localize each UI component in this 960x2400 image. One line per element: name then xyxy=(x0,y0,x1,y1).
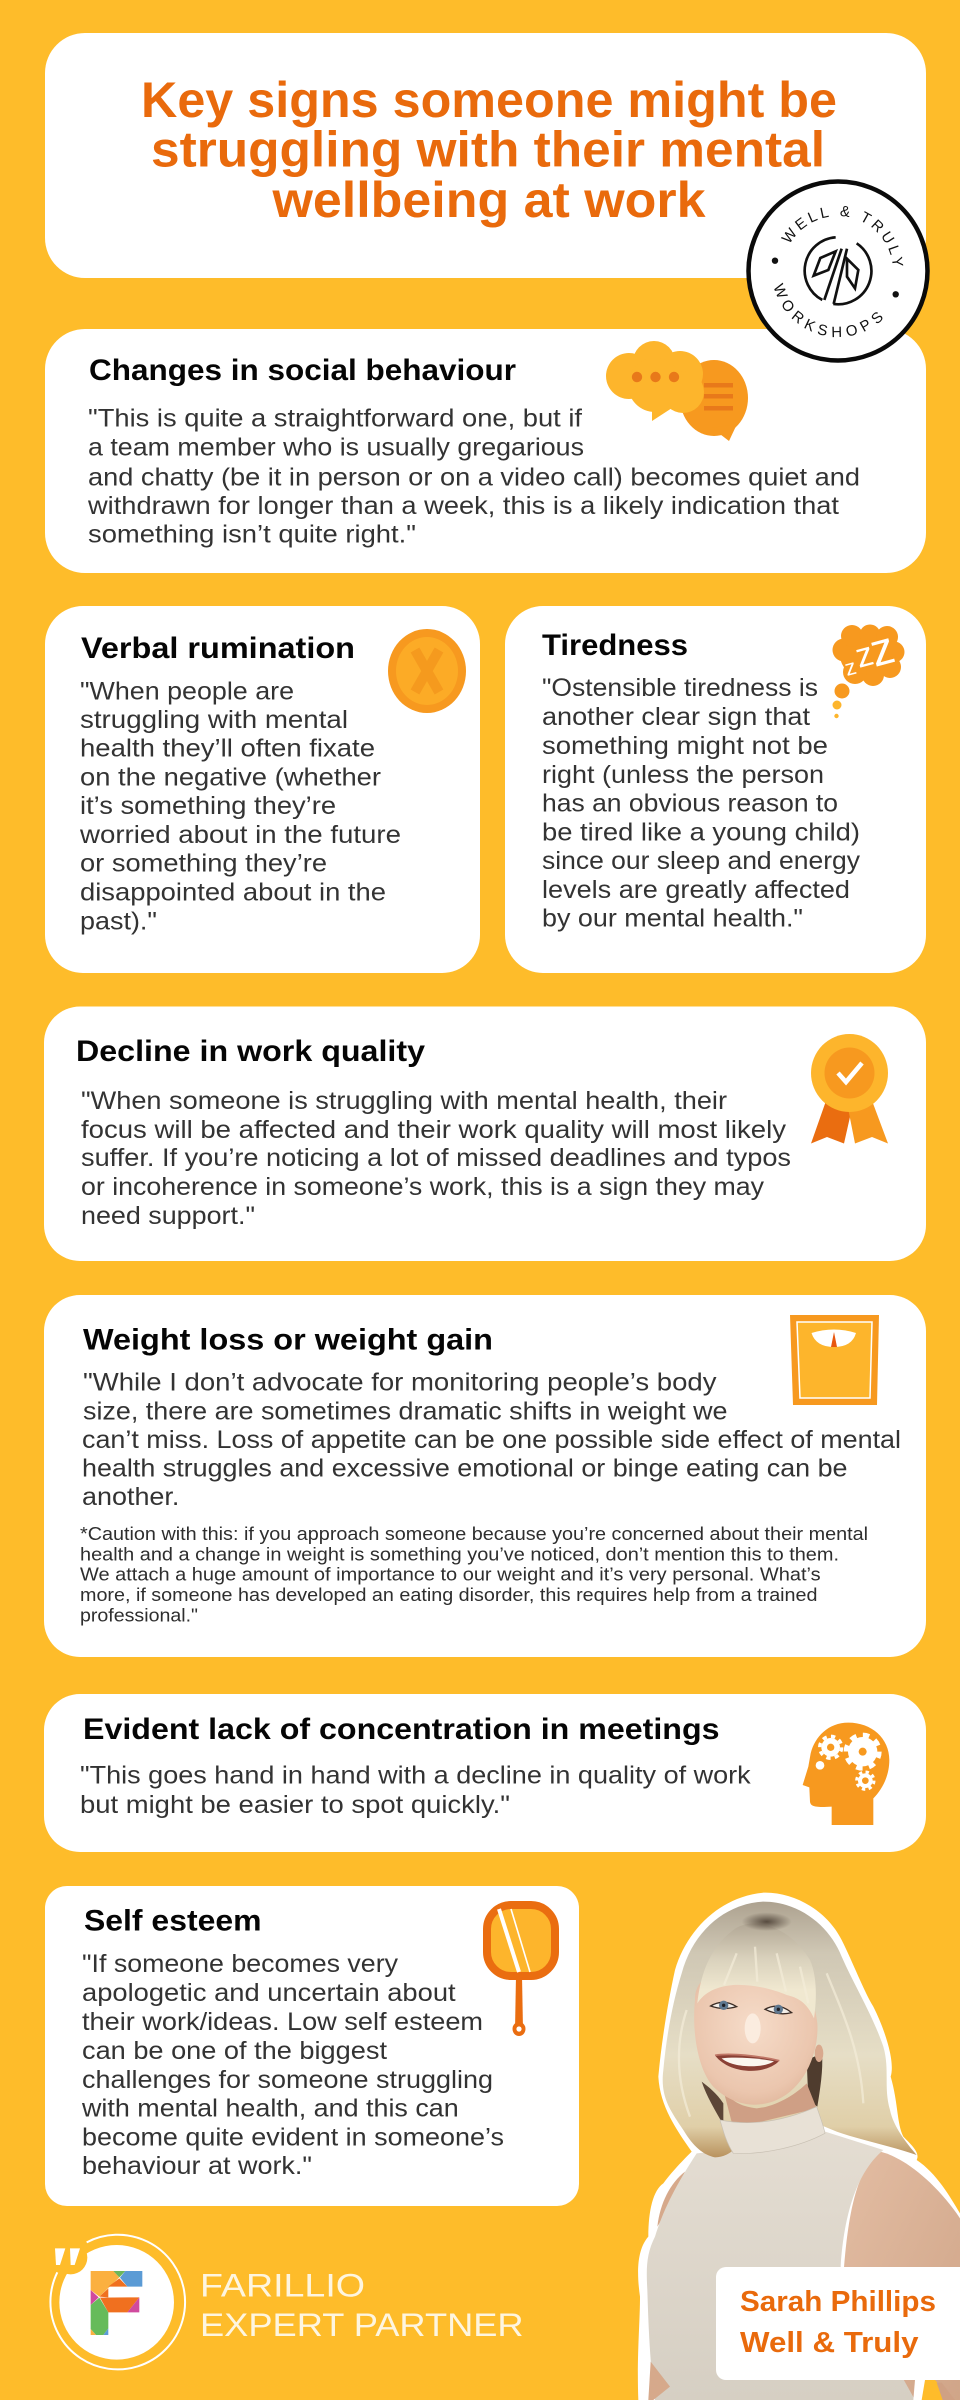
body text: suffer. If you’re noticing a lot of missed deadlines and typos xyxy=(81,1144,791,1172)
heading: Weight loss or weight gain xyxy=(83,1324,493,1357)
body text: has an obvious reason to xyxy=(542,790,838,818)
body text: it’s something they’re xyxy=(80,792,336,820)
icon: sleep thought cloud: z xyxy=(864,620,900,677)
heading: Changes in social behaviour xyxy=(89,354,517,387)
portrait: sarah phillips xyxy=(638,1893,960,2400)
body text: but might be easier to spot quickly." xyxy=(80,1791,510,1819)
body text: levels are greatly affected xyxy=(542,876,850,904)
body text: by our mental health." xyxy=(542,905,803,933)
logo text: EXPERT PARTNER xyxy=(200,2307,524,2343)
caution note: *Caution with this: if you approach someone because you’re concerned about their mental xyxy=(80,1524,868,1544)
body text: another clear sign that xyxy=(542,703,810,731)
name card xyxy=(716,2267,960,2380)
body text: "If someone becomes very xyxy=(82,1950,399,1978)
icon: well and truly workshops badge: WELL & TRULY xyxy=(780,206,904,266)
body text: their work/ideas. Low self esteem xyxy=(82,2008,483,2036)
icon: medal xyxy=(811,1034,888,1144)
panel: changes in social behaviour xyxy=(45,329,926,573)
body text: withdrawn for longer than a week, this is a likely indication that xyxy=(87,492,839,520)
body text: right (unless the person xyxy=(542,761,824,789)
caution note xyxy=(80,1524,868,1625)
body text: be tired like a young child) xyxy=(542,818,860,846)
caution note: professional." xyxy=(80,1605,198,1625)
icon: well and truly workshops badge xyxy=(746,179,930,363)
panel: tiredness xyxy=(505,606,926,973)
body text: worried about in the future xyxy=(79,821,401,849)
body text: health they’ll often fixate xyxy=(80,734,375,762)
logo text xyxy=(200,2268,524,2343)
body text xyxy=(81,1950,504,2180)
icon: head with gears xyxy=(803,1723,889,1825)
body text: something isn’t quite right." xyxy=(88,521,416,549)
caution note: We attach a huge amount of importance to our weight and it’s very personal. What’s xyxy=(80,1565,821,1585)
body text: behaviour at work." xyxy=(82,2152,312,2180)
icon: weighing scale xyxy=(790,1315,879,1405)
body text: need support." xyxy=(81,1202,255,1230)
icon: farillio f mark xyxy=(50,2235,185,2369)
body text: "When people are xyxy=(80,677,294,705)
body text: or incoherence in someone’s work, this is a sign they may xyxy=(81,1173,765,1201)
body text: size, there are sometimes dramatic shifts in weight we xyxy=(83,1397,728,1425)
body text: "Ostensible tiredness is xyxy=(542,674,818,702)
title: wellbeing at work xyxy=(271,172,706,228)
panel: verbal rumination xyxy=(45,606,480,973)
title: struggling with their mental xyxy=(151,122,825,178)
caution note: more, if someone has developed an eating disorder, this requires help from a trained xyxy=(80,1585,818,1605)
icon: sleep thought cloud: z xyxy=(851,635,877,676)
body text: become quite evident in someone’s xyxy=(82,2124,504,2152)
body text: "This goes hand in hand with a decline in quality of work xyxy=(80,1762,751,1790)
heading: Evident lack of concentration in meetings xyxy=(83,1713,720,1746)
body text xyxy=(82,1369,901,1511)
heading: Self esteem xyxy=(84,1905,262,1938)
body text: "While I don’t advocate for monitoring people’s body xyxy=(83,1369,717,1397)
body text: can’t miss. Loss of appetite can be one possible side effect of mental xyxy=(82,1426,901,1454)
body text xyxy=(87,405,860,549)
icon: sleep thought cloud xyxy=(832,620,904,718)
body text: and chatty (be it in person or on a video call) becomes quiet and xyxy=(88,463,860,491)
body text: "This is quite a straightforward one, but if xyxy=(88,405,582,433)
body text: since our sleep and energy xyxy=(542,847,861,875)
body text: past)." xyxy=(80,907,157,935)
heading: Tiredness xyxy=(542,629,688,662)
icon: speech bubbles xyxy=(606,341,748,441)
title: Key signs someone might be xyxy=(141,72,837,128)
panel: evident lack of concentration in meetings xyxy=(44,1694,926,1852)
panel: title xyxy=(45,33,926,278)
body text: another. xyxy=(82,1483,179,1511)
body text: something might not be xyxy=(542,732,828,760)
panel: weight loss or weight gain xyxy=(44,1295,926,1657)
icon: well and truly workshops badge: WORKSHOPS xyxy=(774,282,882,338)
body text: can be one of the biggest xyxy=(82,2037,387,2065)
body text: health struggles and excessive emotional or binge eating can be xyxy=(82,1454,848,1482)
body text xyxy=(542,674,861,933)
name card: Sarah Phillips xyxy=(740,2286,936,2318)
icon: hand mirror xyxy=(487,1905,555,2036)
icon: x coin xyxy=(388,629,466,713)
title xyxy=(141,72,837,228)
body text: a team member who is usually gregarious xyxy=(88,433,584,461)
heading: Verbal rumination xyxy=(81,632,355,665)
logo: farillio xyxy=(50,2235,524,2369)
panel: decline in work quality xyxy=(44,1006,926,1261)
logo text: FARILLIO xyxy=(200,2268,365,2304)
body text: struggling with mental xyxy=(80,706,348,734)
body text: focus will be affected and their work quality will most likely xyxy=(81,1116,787,1144)
body text: disappointed about in the xyxy=(80,879,386,907)
body text: apologetic and uncertain about xyxy=(82,1979,456,2007)
name card: Well & Truly xyxy=(740,2327,918,2359)
body text xyxy=(81,1087,791,1230)
body text: or something they’re xyxy=(80,850,327,878)
body text xyxy=(80,1762,751,1819)
body text: "When someone is struggling with mental health, their xyxy=(81,1087,727,1115)
icon: sleep thought cloud: z xyxy=(842,654,859,681)
caution note: health and a change in weight is something you’ve noticed, don’t mention this to them. xyxy=(80,1544,839,1564)
body text: on the negative (whether xyxy=(80,764,381,792)
body text: with mental health, and this can xyxy=(81,2094,459,2122)
body text: challenges for someone struggling xyxy=(82,2066,493,2094)
heading: Decline in work quality xyxy=(76,1035,426,1068)
body text xyxy=(79,677,401,935)
panel: self esteem xyxy=(45,1886,579,2206)
